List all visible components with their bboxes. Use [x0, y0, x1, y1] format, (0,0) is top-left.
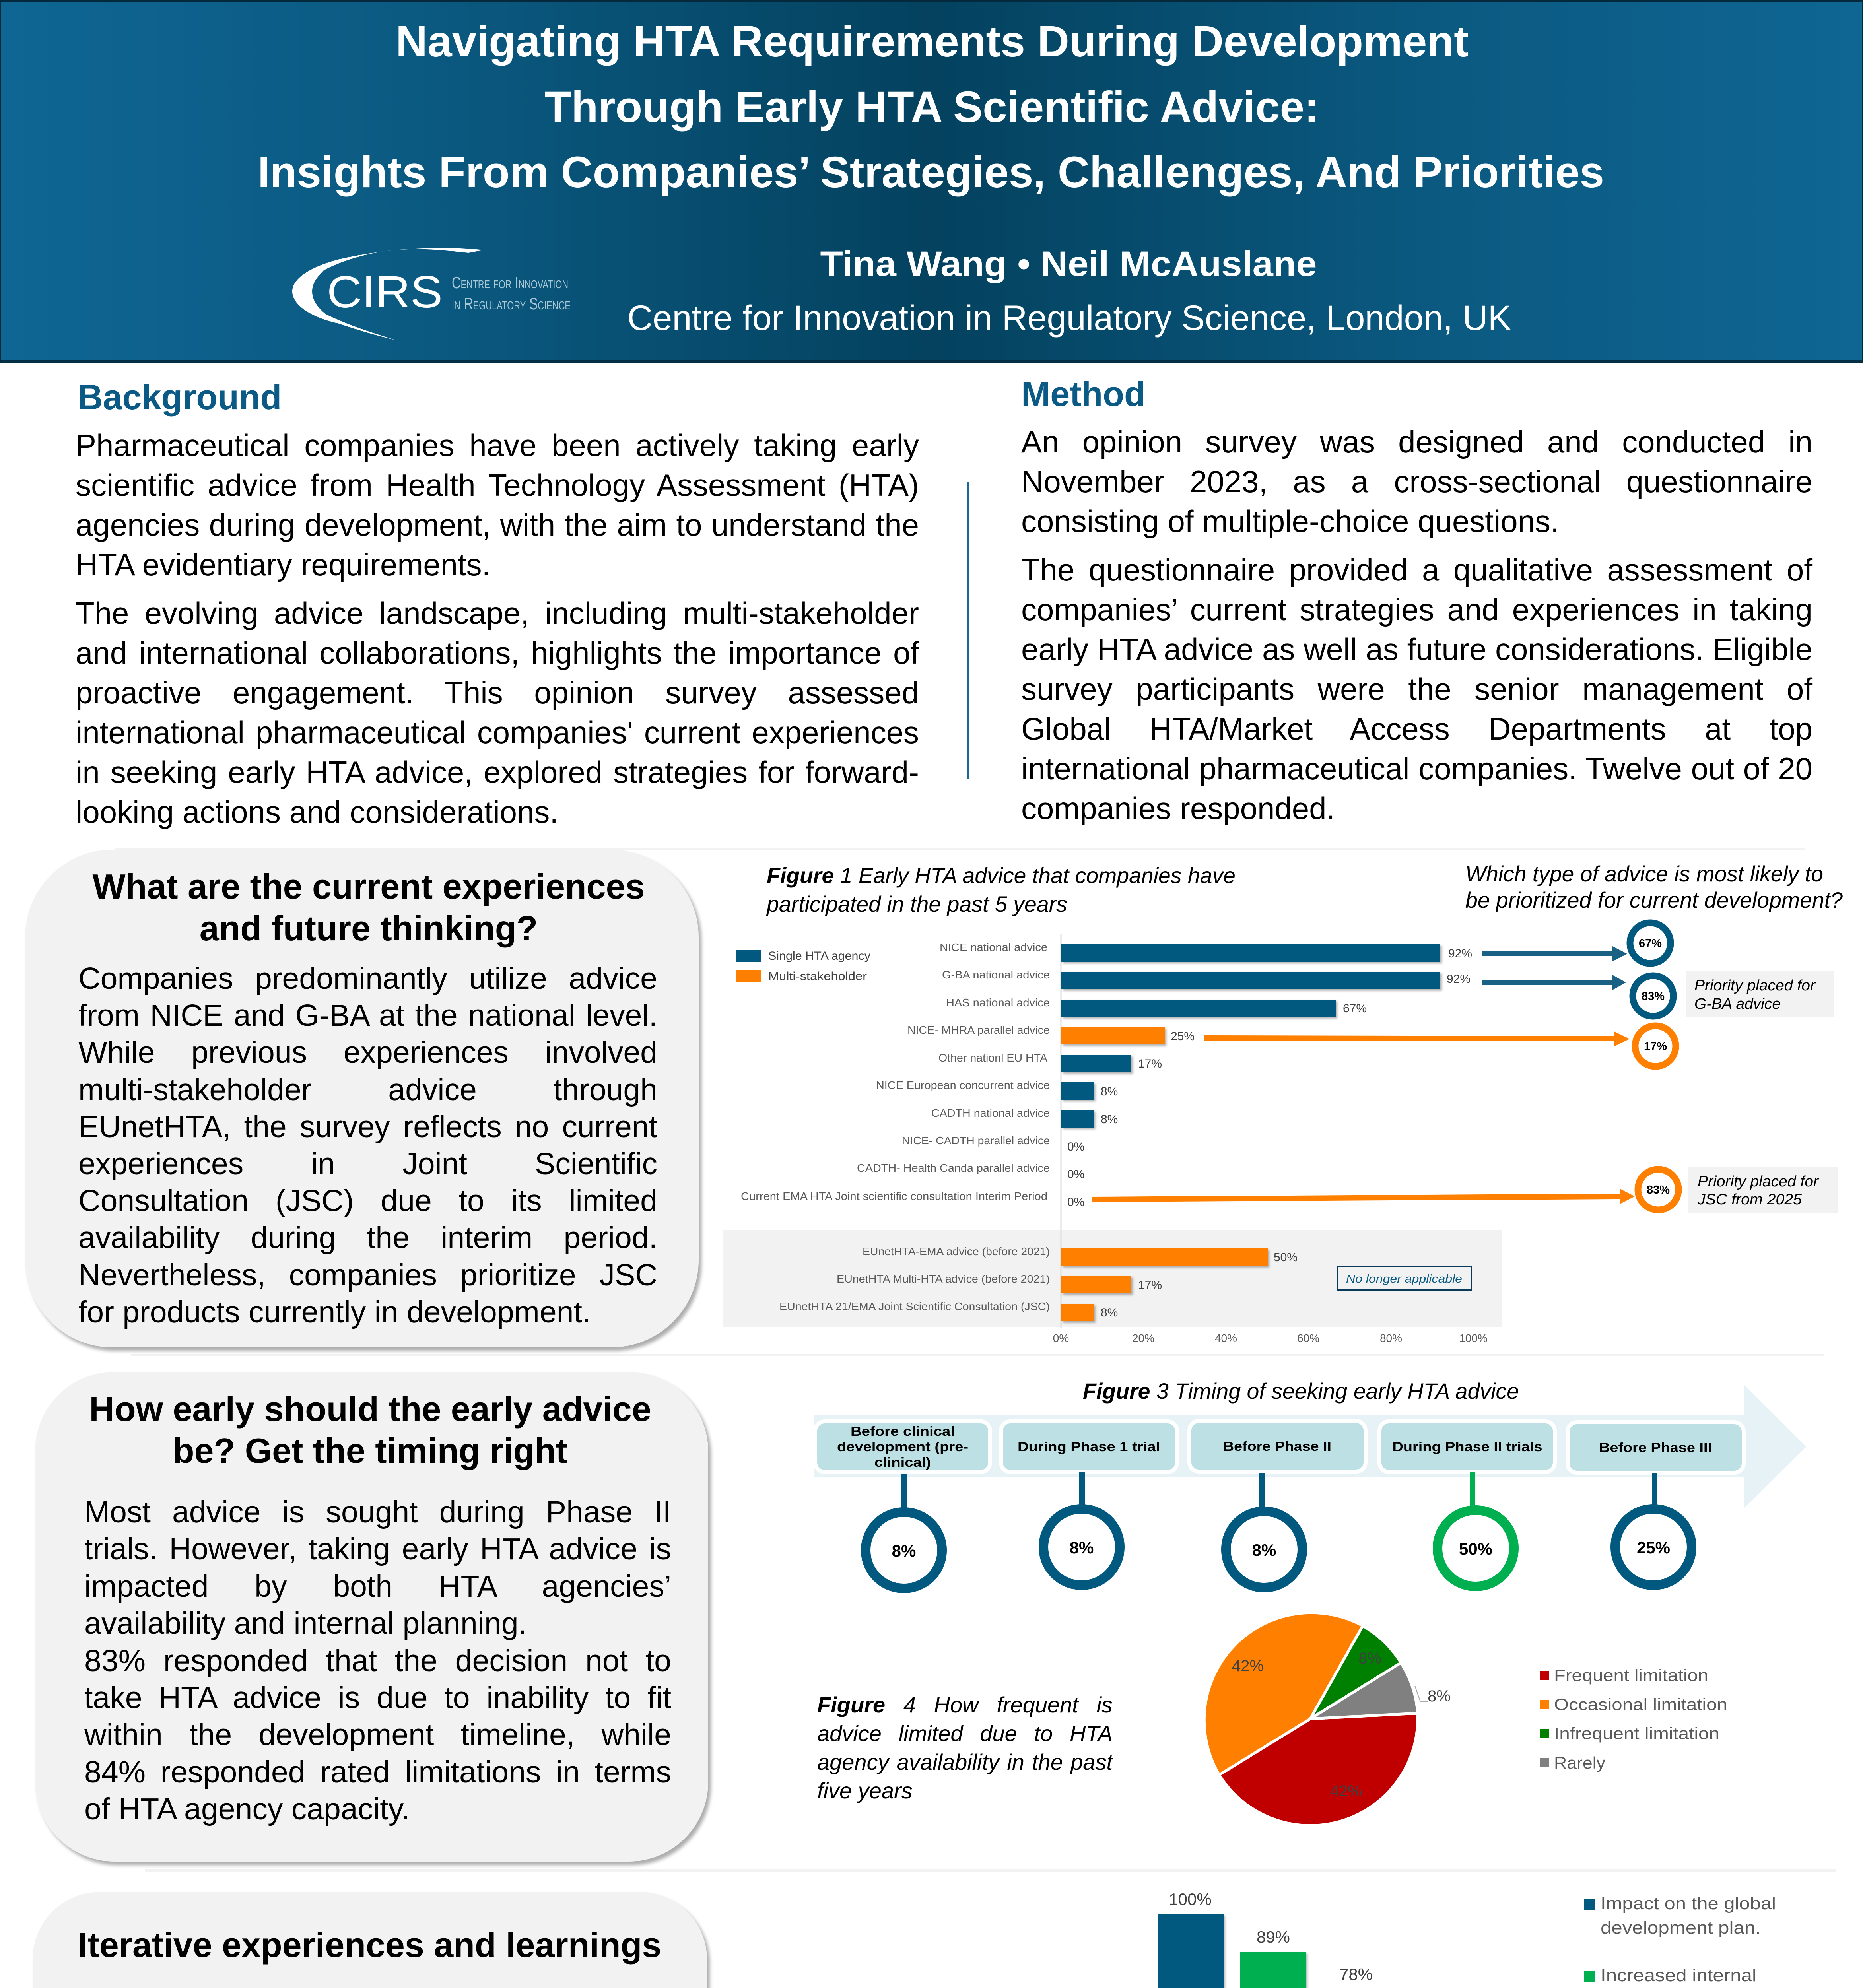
panel body: trials. However, taking early HTA advice is [84, 1532, 671, 1566]
category labels [741, 941, 1050, 1312]
text: background body: international pharmaceutical companies' current experiences [76, 715, 919, 750]
pie legend: Infrequent limitation [1554, 1724, 1719, 1743]
arrow: NICE to 67% [1482, 946, 1627, 961]
legend: global development plan: development plan. [1601, 1918, 1761, 1938]
axis labels: 0% [1053, 1332, 1069, 1344]
note: G-BA priority: Priority placed for [1694, 977, 1816, 994]
value labels: 8% [1101, 1306, 1118, 1319]
figure 1: early HTA advice bar chart [708, 851, 1863, 1354]
text: method body [1021, 422, 1812, 828]
axis labels: 40% [1215, 1332, 1237, 1344]
legend: internal learnings: Increased internal [1601, 1966, 1756, 1985]
text: background body: scientific advice from Health Technology Assessment (HTA) [76, 468, 919, 503]
connector and ring: 50% during phase II: 50% [1459, 1540, 1492, 1558]
panel heading: and future thinking? [200, 909, 538, 948]
figure 4 caption: Figure 4 How frequent is [817, 1692, 1113, 1717]
category labels: HAS national advice [946, 996, 1050, 1009]
axis labels: 60% [1297, 1332, 1319, 1344]
stage: during phase 1 [1001, 1421, 1177, 1472]
panel: timing [35, 1372, 708, 1862]
panel body [84, 1494, 671, 1828]
category labels: EUnetHTA 21/EMA Joint Scientific Consultation (JSC) [779, 1300, 1050, 1312]
figure 3 caption: Figure 3 Timing of seeking early HTA advice [1083, 1378, 1519, 1404]
authors: Tina Wang • Neil McAuslane [820, 244, 1317, 283]
category labels: CADTH national advice [931, 1107, 1050, 1119]
text: background body [76, 425, 919, 832]
stage: before clinical development: development (pre- [837, 1439, 968, 1454]
value labels: 92% [1447, 973, 1471, 986]
panel body: of HTA agency capacity. [84, 1792, 410, 1826]
stage: during phase II: During Phase II trials [1393, 1439, 1542, 1454]
stage: before clinical development: Before clinical [851, 1424, 955, 1439]
figure 4 caption: agency availability in the past [817, 1749, 1113, 1774]
figure 5: bar chart [811, 1881, 1863, 1988]
legacy grey box [723, 1230, 1502, 1327]
ring: 67% [1630, 923, 1671, 963]
ring: 83% [1633, 976, 1673, 1016]
axis labels [1053, 1332, 1488, 1344]
value labels: 92% [1448, 947, 1472, 960]
pie legend: Frequent limitation [1554, 1666, 1708, 1685]
panel body: Companies predominantly utilize advice [78, 961, 657, 996]
stage: before clinical development: clinical) [874, 1455, 931, 1470]
CIRS logo: in Regulatory Science [452, 294, 571, 313]
heading: Background: Background [78, 377, 282, 417]
panel body: Consultation (JSC) due to its limited [78, 1184, 657, 1218]
category labels: NICE- MHRA parallel advice [907, 1024, 1050, 1036]
heading: Method: Method [1021, 374, 1146, 414]
panel body: EUnetHTA, the survey reflects no current [78, 1110, 657, 1144]
text: background body: looking actions and considerations. [76, 794, 558, 829]
arrow: G-BA to 83% [1482, 975, 1626, 990]
pie value labels [1232, 1650, 1451, 1800]
panel body: experiences in Joint Scientific [78, 1147, 657, 1181]
legend: Multi-stakeholder [768, 970, 867, 983]
value labels [1067, 947, 1472, 1319]
note: JSC priority: JSC from 2025 [1697, 1191, 1802, 1208]
pie value labels: 42% [1330, 1782, 1362, 1800]
ring: 17%: 17% [1644, 1040, 1667, 1053]
legend [736, 949, 870, 983]
category labels: NICE national advice [940, 941, 1047, 953]
pie legend: Rarely [1554, 1753, 1605, 1772]
value labels: 0% [1067, 1196, 1084, 1209]
text: background body: The evolving advice landscape, including multi-stakeholder [76, 596, 919, 631]
value labels: 50% [1274, 1251, 1298, 1264]
value labels: 17% [1138, 1057, 1162, 1070]
text: method body: November 2023, as a cross-sectional questionnaire [1021, 464, 1812, 499]
figure 1 caption: Figure 1 Early HTA advice that companies have [767, 863, 1236, 888]
timeline arrow [814, 1385, 1806, 1508]
panel body: impacted by both HTA agencies’ [84, 1569, 671, 1604]
panel body: Most advice is sought during Phase II [84, 1495, 671, 1529]
connector and ring: 8% before phase II: 8% [1252, 1541, 1276, 1559]
axis labels: 80% [1380, 1332, 1402, 1344]
connector and ring: 8% phase 1 [1043, 1472, 1120, 1585]
pie value labels: 8% [1428, 1687, 1451, 1705]
text: method body: early HTA advice as well as future considerations. Eligible [1021, 632, 1812, 667]
connector and ring: 50% during phase II [1438, 1472, 1514, 1586]
panel heading: be? Get the timing right [173, 1431, 567, 1470]
figure 3: timing arrow [811, 1368, 1813, 1598]
ring: 83% JSC [1638, 1169, 1678, 1210]
stage: before phase III: Before Phase III [1599, 1440, 1712, 1455]
axis labels: 100% [1459, 1332, 1488, 1344]
panel body: Nevertheless, companies prioritize JSC [78, 1258, 657, 1292]
header banner [0, 0, 1863, 363]
panel body: for products currently in development. [78, 1295, 591, 1329]
text: background body: and international collaborations, highlights the importance of [76, 635, 919, 670]
category labels: G-BA national advice [942, 969, 1050, 981]
panel body: within the development timeline, while [84, 1718, 671, 1752]
priority question: Which type of advice is most likely to [1465, 861, 1823, 886]
legend: Single HTA agency [768, 949, 870, 963]
panel body: availability and internal planning. [84, 1606, 527, 1640]
text: method body: An opinion survey was designed and conducted in [1021, 424, 1812, 459]
connector and ring: 8% before phase II [1226, 1473, 1302, 1588]
arrow: NICE-MHRA to 17% [1204, 1031, 1630, 1046]
note: G-BA priority [1686, 971, 1834, 1017]
ring: 17% [1635, 1026, 1676, 1066]
text: background body: proactive engagement. This opinion survey assessed [76, 675, 919, 710]
category labels: CADTH- Health Canda parallel advice [857, 1162, 1050, 1174]
panel body: availability during the interim period. [78, 1221, 657, 1255]
value labels: 0% [1067, 1140, 1084, 1153]
pie legend [1540, 1666, 1727, 1772]
panel: current experiences [25, 850, 699, 1347]
category labels: NICE- CADTH parallel advice [902, 1134, 1050, 1147]
stage: before phase III [1568, 1422, 1744, 1473]
text: method body: companies responded. [1021, 791, 1335, 826]
figure 4: pie chart [1193, 1602, 1750, 1837]
legend: global development plan [1584, 1894, 1776, 1938]
value labels: 25% [1171, 1030, 1195, 1043]
panel body: While previous experiences involved [78, 1035, 657, 1070]
stage: during phase II [1379, 1421, 1555, 1472]
figure 4 caption: five years [817, 1778, 913, 1803]
title: Navigating HTA Requirements During Development [396, 17, 1469, 66]
stage: during phase 1: During Phase 1 trial [1018, 1439, 1160, 1454]
value labels: 67% [1343, 1002, 1367, 1015]
stage: before phase II [1189, 1421, 1366, 1472]
ring: 83%: 83% [1642, 990, 1665, 1003]
panel heading: What are the current experiences [93, 867, 645, 906]
value labels: 0% [1067, 1168, 1084, 1181]
figure 4 caption [817, 1691, 1113, 1805]
text: method body: Global HTA/Market Access Departments at top [1021, 711, 1812, 746]
panel heading: Iterative experiences and learnings [78, 1925, 661, 1965]
priority question [1465, 861, 1843, 912]
text: method body: The questionnaire provided a qualitative assessment of [1021, 552, 1812, 587]
text: background body: HTA evidentiary requirements. [76, 547, 490, 582]
panel body: take HTA advice is due to inability to fit [84, 1681, 671, 1715]
callout: no longer applicable: No longer applicable [1346, 1273, 1462, 1285]
bar values: 100% [1169, 1890, 1212, 1908]
note: G-BA priority: G-BA advice [1694, 996, 1781, 1012]
panel body: from NICE and G-BA at the national level. [78, 998, 657, 1033]
connector and ring: 8% pre-clinical [866, 1474, 942, 1588]
category labels: Current EMA HTA Joint scientific consultation Interim Period [741, 1190, 1047, 1202]
ring: 83% JSC: 83% [1647, 1184, 1670, 1196]
CIRS logo [292, 248, 571, 340]
panel heading [35, 1388, 705, 1472]
text: background body: in seeking early HTA advice, explored strategies for forward- [76, 755, 919, 790]
pie value labels: 8% [1358, 1650, 1381, 1667]
bars [1061, 944, 1440, 1321]
arrow: EMA HTA to 83% [1092, 1189, 1635, 1204]
pie value labels: 42% [1232, 1657, 1264, 1675]
category labels: EUnetHTA-EMA advice (before 2021) [863, 1245, 1050, 1258]
title [258, 17, 1604, 197]
priority question: be prioritized for current development? [1465, 887, 1843, 912]
text: background body: agencies during development, with the aim to understand the [76, 507, 919, 542]
CIRS logo: CIRS [327, 267, 443, 317]
text: method body: survey participants were the senior management of [1021, 672, 1812, 707]
callout: no longer applicable [1337, 1266, 1471, 1290]
title: Insights From Companies’ Strategies, Challenges, And Priorities [258, 148, 1604, 197]
stage: before clinical development [815, 1421, 990, 1472]
category labels: NICE European concurrent advice [876, 1079, 1050, 1091]
bar values: 89% [1257, 1928, 1290, 1946]
figure 1 caption: participated in the past 5 years [766, 891, 1067, 916]
ring: 67%: 67% [1639, 937, 1662, 950]
note: JSC priority: Priority placed for [1698, 1173, 1819, 1190]
panel heading: How early should the early advice [89, 1389, 651, 1429]
affiliation: Centre for Innovation in Regulatory Science, London, UK [627, 298, 1511, 338]
bar values: 78% [1339, 1965, 1373, 1984]
connector and ring: 8% phase 1: 8% [1070, 1538, 1094, 1557]
panel body [78, 960, 657, 1331]
panel heading [25, 866, 712, 949]
pie slices [1204, 1613, 1418, 1825]
connector and ring: 8% pre-clinical: 8% [892, 1541, 916, 1560]
text: method body: companies’ current strategies and experiences in taking [1021, 592, 1812, 627]
panel: iterative learnings [33, 1892, 707, 1988]
text: method body: consisting of multiple-choice questions. [1021, 504, 1559, 539]
panel body: 83% responded that the decision not to [84, 1644, 671, 1678]
text: method body: international pharmaceutical companies. Twelve out of 20 [1021, 751, 1812, 786]
stage: before phase II: Before Phase II [1223, 1439, 1331, 1454]
value labels: 8% [1101, 1113, 1118, 1126]
value labels: 17% [1138, 1279, 1162, 1292]
connector and ring: 25% before phase III [1615, 1473, 1692, 1585]
connector and ring: 25% before phase III: 25% [1637, 1538, 1670, 1557]
panel body: 84% responded rated limitations in terms [84, 1755, 671, 1789]
text: background body: Pharmaceutical companies have been actively taking early [76, 428, 919, 463]
bars [1158, 1914, 1554, 1988]
bar values [1169, 1890, 1538, 1988]
note: JSC priority [1688, 1167, 1838, 1213]
panel body: multi-stakeholder advice through [78, 1073, 657, 1107]
legend: global development plan: Impact on the global [1601, 1894, 1776, 1913]
figure 4 caption: advice limited due to HTA [817, 1721, 1113, 1746]
value labels: 8% [1101, 1085, 1118, 1098]
pie legend: Occasional limitation [1554, 1695, 1727, 1714]
category labels: EUnetHTA Multi-HTA advice (before 2021) [837, 1273, 1050, 1285]
figure 1 caption [766, 863, 1236, 916]
category labels: Other nationl EU HTA [938, 1052, 1047, 1064]
axis labels: 20% [1132, 1332, 1154, 1344]
CIRS logo: Centre for Innovation [452, 273, 568, 292]
title: Through Early HTA Scientific Advice: [544, 83, 1319, 132]
